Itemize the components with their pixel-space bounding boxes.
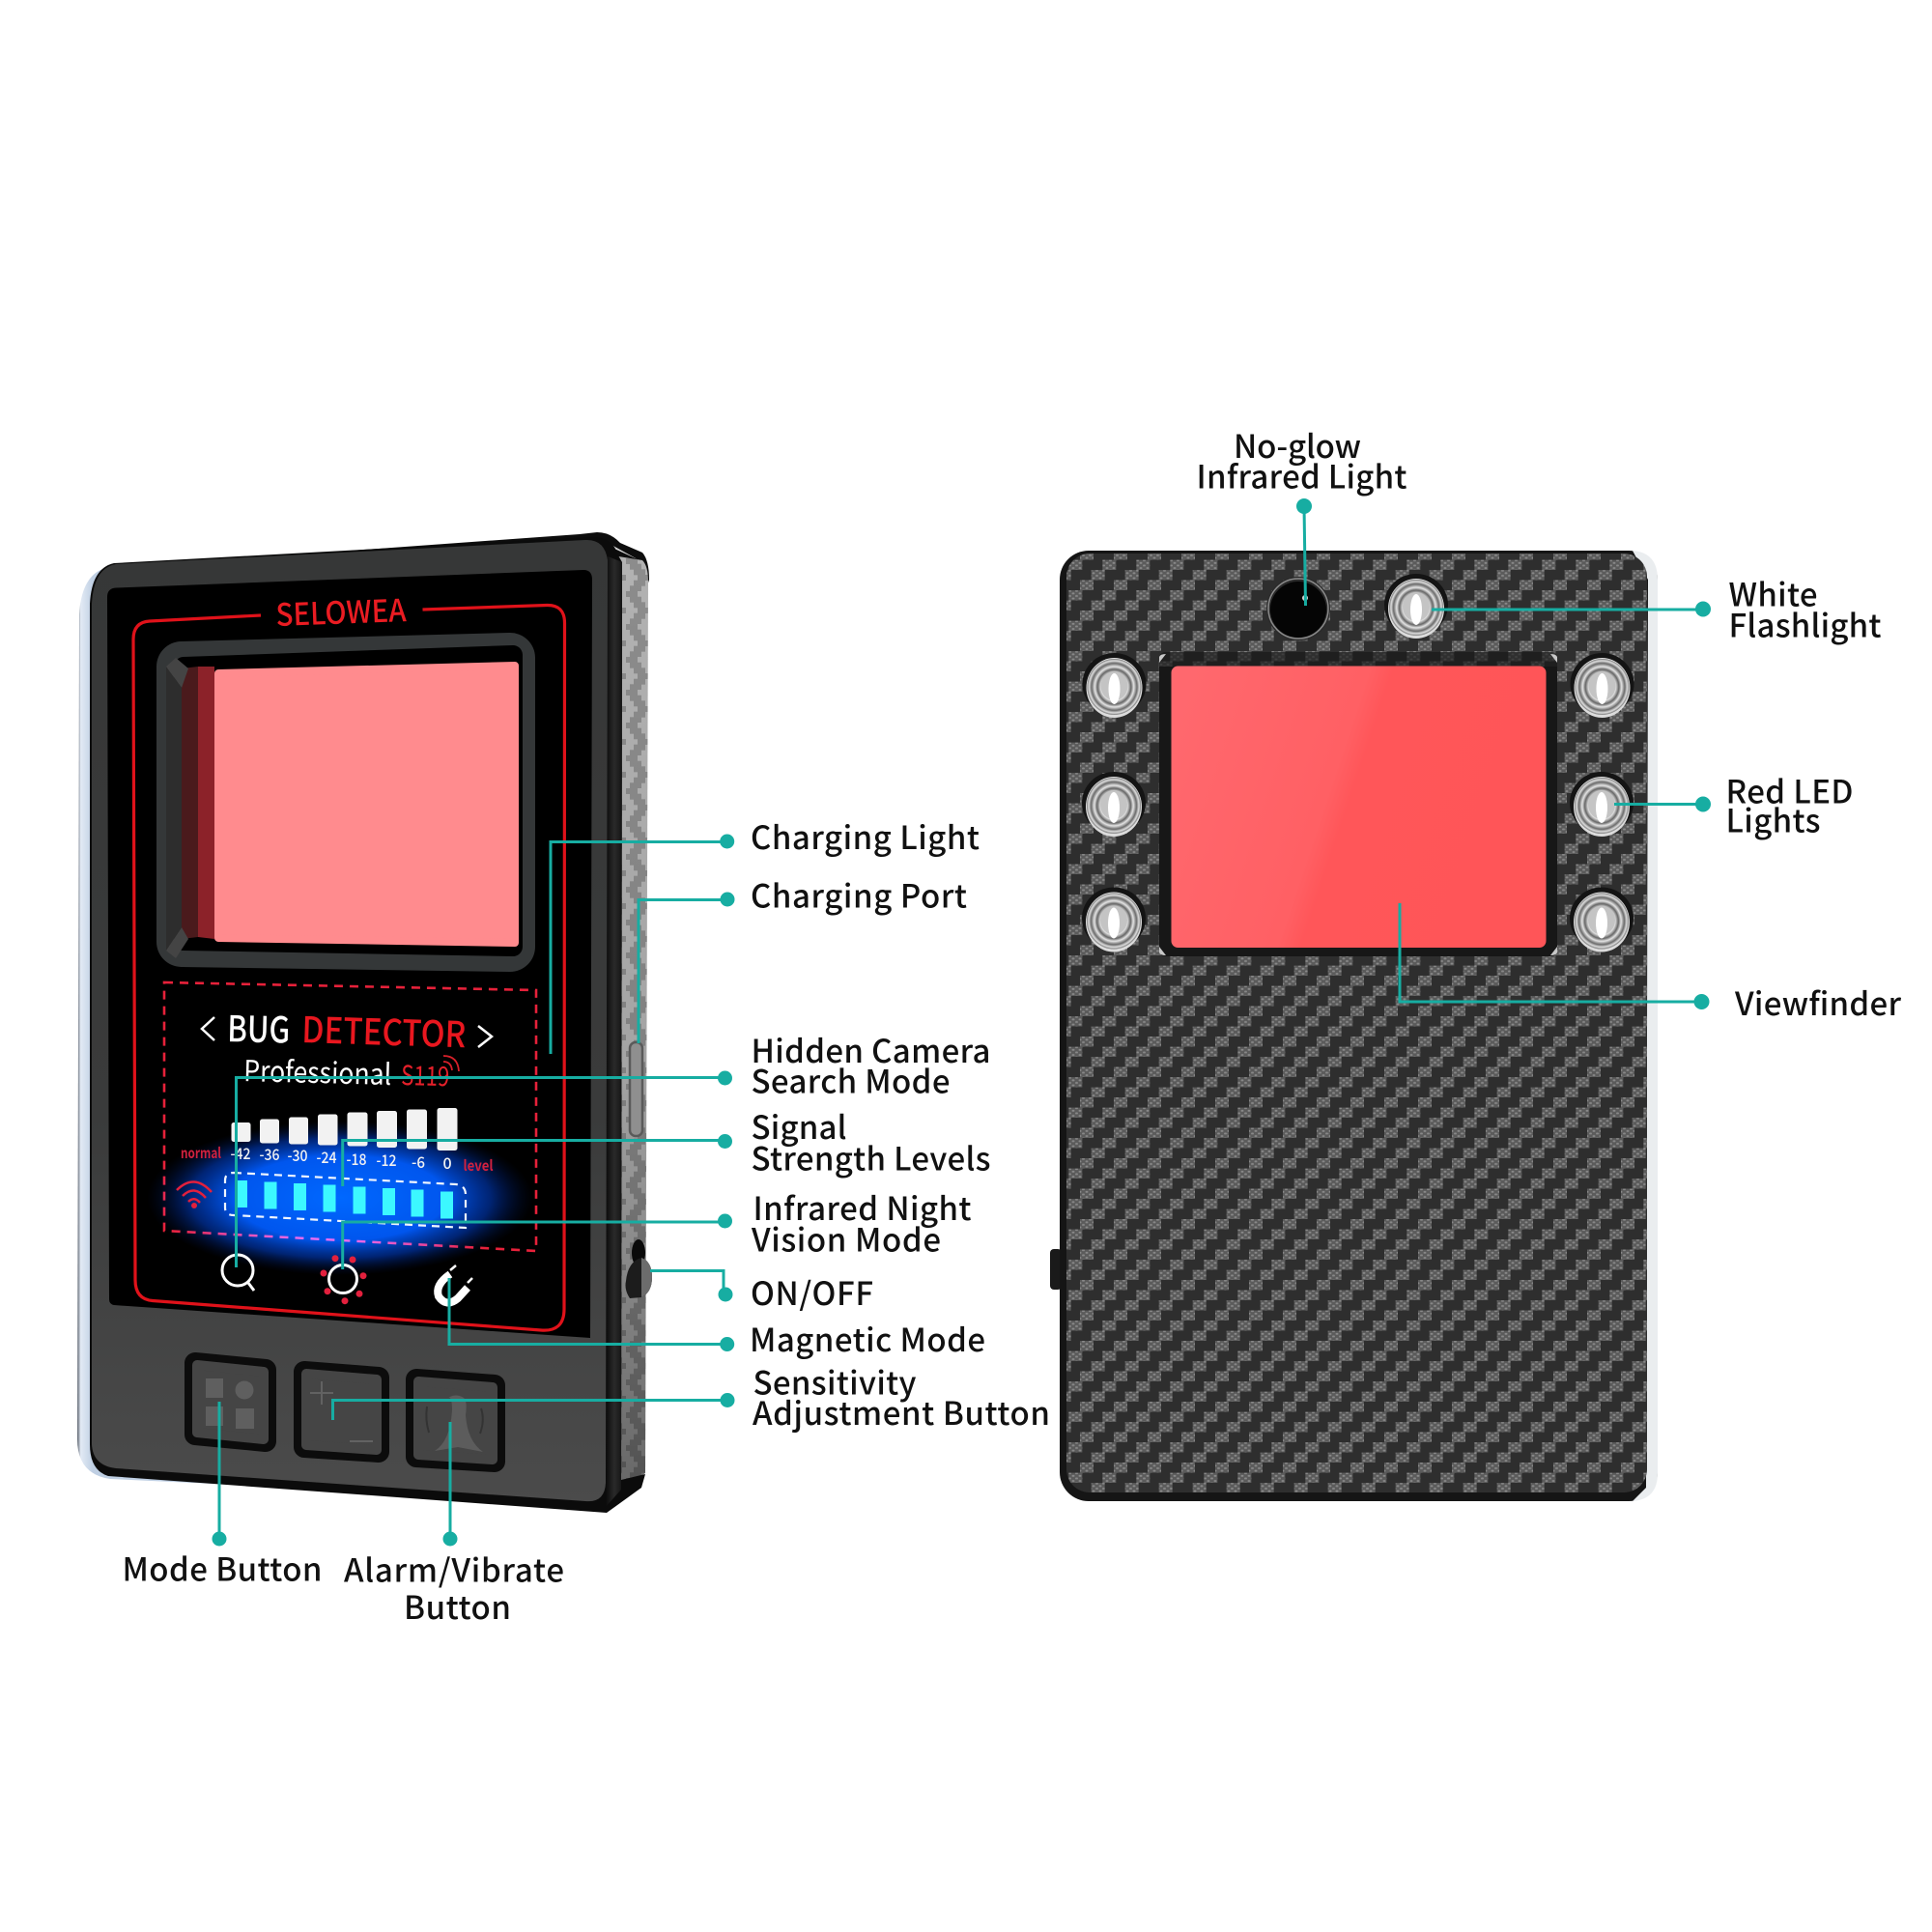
label: White Flashlight bbox=[1729, 570, 1882, 647]
side button bbox=[1050, 1249, 1062, 1290]
label: Charging Light: Charging Light bbox=[751, 812, 980, 859]
label: Magnetic Mode: Magnetic Mode bbox=[750, 1315, 985, 1361]
label: Signal Strength Levels: Strength Levels bbox=[752, 1134, 991, 1180]
front face bbox=[92, 540, 608, 1501]
label: Alarm/Vibrate Button: Alarm/Vibrate bbox=[344, 1546, 564, 1592]
rear view device bbox=[1050, 551, 1658, 1501]
silver rear edge bbox=[77, 570, 213, 1484]
label: White Flashlight: White bbox=[1729, 570, 1818, 616]
white flashlight LED bbox=[1384, 574, 1448, 639]
scale labels: -36 bbox=[259, 1142, 280, 1165]
scale labels: 0 bbox=[442, 1151, 452, 1174]
red outline frame bbox=[133, 605, 564, 1330]
carbon side strip bbox=[618, 556, 648, 1492]
body silhouette bbox=[90, 537, 645, 1513]
label: Red LED Lights: Red LED bbox=[1725, 767, 1853, 813]
label: Hidden Camera Search Mode: Search Mode bbox=[752, 1057, 951, 1103]
callout lines and dots bbox=[213, 498, 1711, 1546]
charging port bbox=[630, 1042, 642, 1136]
label: ON/OFF: ON/OFF bbox=[751, 1268, 873, 1315]
scale labels: -24 bbox=[317, 1145, 336, 1168]
front view device bbox=[77, 532, 652, 1513]
chrome bezel strip bbox=[606, 555, 622, 1507]
label: No-glow Infrared Light bbox=[1196, 421, 1406, 498]
title BUG DETECTOR bbox=[202, 1000, 492, 1058]
button: sensitivity bbox=[304, 1372, 379, 1452]
title BUG DETECTOR: BUG bbox=[227, 1000, 291, 1053]
label: Infrared Night Vision Mode: Vision Mode bbox=[751, 1215, 941, 1262]
carbon fibre surface bbox=[1066, 554, 1647, 1492]
label: Alarm/Vibrate Button: Button bbox=[404, 1582, 511, 1629]
dashed cyan bar frame bbox=[225, 1173, 466, 1228]
label: Charging Port: Charging Port bbox=[751, 871, 967, 918]
scale labels: -12 bbox=[377, 1148, 396, 1171]
viewfinder lens bbox=[1171, 667, 1546, 948]
viewfinder recess bbox=[184, 655, 513, 947]
icon: magnifier search bbox=[222, 1255, 254, 1291]
red LEDs left bbox=[1082, 653, 1146, 952]
recess inner wall bbox=[166, 658, 214, 958]
top back plate with glint bbox=[290, 532, 649, 618]
subtitle Professional S119: S119 bbox=[401, 1055, 450, 1094]
label: Red LED Lights: Lights bbox=[1725, 796, 1820, 842]
label: Mode Button: Mode Button bbox=[122, 1544, 323, 1590]
blue glow bbox=[147, 1121, 533, 1275]
label: Sensitivity Adjustment Button: Sensitivity bbox=[753, 1358, 917, 1405]
label: Viewfinder: Viewfinder bbox=[1734, 979, 1901, 1025]
scale labels: level bbox=[464, 1155, 494, 1176]
button: mode bbox=[195, 1363, 266, 1441]
scale labels: -42 bbox=[230, 1141, 251, 1164]
icon: infrared sun bbox=[321, 1255, 367, 1304]
scale labels: -6 bbox=[412, 1150, 425, 1173]
white signal bars bbox=[232, 1108, 458, 1151]
label: Signal Strength Levels bbox=[752, 1102, 991, 1180]
scale labels: -18 bbox=[346, 1147, 367, 1170]
label: Hidden Camera Search Mode bbox=[752, 1026, 991, 1103]
label: No-glow Infrared Light: No-glow bbox=[1234, 421, 1361, 468]
label: Signal Strength Levels: Signal bbox=[752, 1102, 846, 1149]
brand SELOWEA: SELOWEA bbox=[275, 586, 407, 636]
icon: magnet bbox=[438, 1265, 472, 1303]
scale labels: -30 bbox=[288, 1143, 307, 1166]
label: Sensitivity Adjustment Button bbox=[753, 1358, 1050, 1435]
label: Hidden Camera Search Mode: Hidden Camera bbox=[752, 1026, 991, 1072]
red LEDs right bbox=[1570, 653, 1634, 952]
infrared lens bbox=[1266, 577, 1330, 640]
title BUG DETECTOR: DETECTOR bbox=[301, 1001, 467, 1058]
rear body shell bbox=[1060, 551, 1658, 1501]
label: No-glow Infrared Light: Infrared Light bbox=[1196, 452, 1406, 498]
display panel bbox=[107, 570, 592, 1338]
label: Infrared Night Vision Mode: Infrared Night bbox=[753, 1183, 972, 1230]
scale labels bbox=[181, 1141, 494, 1176]
power switch bbox=[626, 1239, 652, 1298]
cyan level bars bbox=[236, 1180, 453, 1219]
label: Red LED Lights bbox=[1725, 767, 1853, 842]
icon: wifi bbox=[177, 1181, 212, 1208]
viewfinder frame bbox=[182, 658, 510, 947]
label: White Flashlight: Flashlight bbox=[1729, 601, 1882, 647]
subtitle Professional S119: Professional bbox=[243, 1047, 392, 1094]
scale labels: normal bbox=[181, 1143, 221, 1163]
viewfinder recess bbox=[1159, 652, 1557, 956]
right silver edge bbox=[1633, 551, 1658, 1501]
label: Infrared Night Vision Mode bbox=[751, 1183, 972, 1262]
label: Sensitivity Adjustment Button: Adjustment Button bbox=[753, 1388, 1050, 1435]
viewfinder red lens bbox=[218, 666, 515, 943]
label: Alarm/Vibrate Button bbox=[344, 1546, 564, 1629]
button: alarm vibrate bbox=[416, 1379, 495, 1462]
dashed panel bbox=[164, 982, 536, 1251]
